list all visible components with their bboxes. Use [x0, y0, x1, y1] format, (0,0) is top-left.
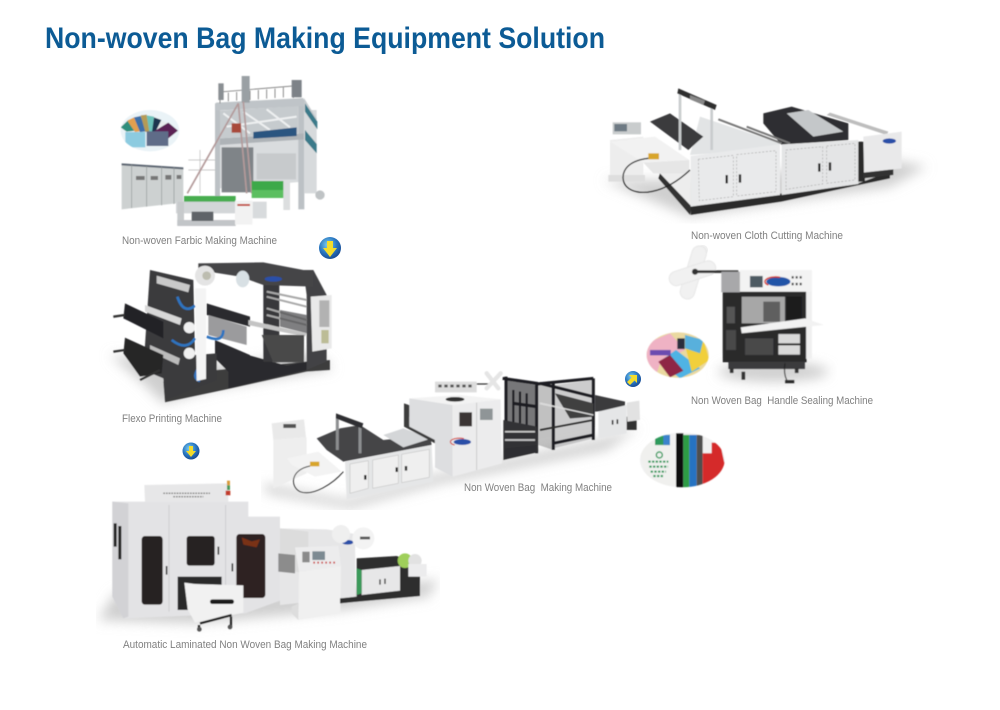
control panel — [311, 295, 332, 352]
drawer opening — [178, 577, 222, 610]
base — [163, 360, 330, 402]
underside — [658, 170, 691, 207]
control console — [610, 137, 643, 177]
feed table — [287, 452, 342, 477]
title: Non-woven Bag Making Equipment Solution — [45, 22, 605, 55]
top plate — [198, 262, 313, 287]
left printing frame — [143, 270, 217, 400]
caption: flexo machine: Flexo Printing Machine — [122, 413, 222, 425]
white sealing cabinet — [409, 395, 501, 405]
machine: non-woven fabric making — [117, 76, 325, 226]
base cabinet — [345, 445, 433, 499]
caption: laminated machine: Automatic Laminated Non Woven Bag Making Machine — [123, 639, 367, 651]
floor shadow — [98, 580, 438, 623]
winder base — [176, 202, 236, 213]
floor shadow — [718, 362, 828, 382]
paper rolls — [332, 525, 350, 543]
arrow icon: bag machine to handle sealing — [625, 371, 641, 387]
caption: handle sealing machine: Non Woven Bag Handle Sealing Machine — [691, 395, 873, 407]
main cabinet — [112, 502, 280, 618]
arrow icon: faint — [698, 245, 708, 255]
floor shadow — [603, 160, 927, 217]
machine: cloth cutting — [603, 88, 927, 217]
electrical cabinets — [122, 163, 183, 209]
arrow icon: fabric to printing — [319, 237, 341, 259]
machine: non-woven bag making line — [263, 373, 640, 508]
work table — [741, 318, 824, 333]
top hood — [144, 483, 228, 502]
cutting mechanism — [317, 425, 432, 462]
control console — [272, 419, 306, 440]
lower section — [778, 334, 800, 343]
blue hoses — [172, 297, 223, 381]
feet and pedal — [732, 368, 797, 380]
middle print units — [207, 303, 250, 327]
lifting arm — [680, 90, 712, 150]
right module — [340, 556, 420, 603]
logo — [265, 276, 282, 282]
infographic canvas — [46, 26, 924, 650]
white center column and rollers — [195, 288, 206, 381]
machine: flexo printing — [110, 262, 333, 403]
caption: fabric machine: Non-woven Farbic Making Machine — [122, 235, 277, 247]
top control panel — [740, 270, 812, 292]
steel frame — [188, 98, 317, 209]
window: left — [142, 536, 163, 605]
fabric swatches — [120, 110, 180, 152]
right frame — [263, 283, 279, 362]
logo — [454, 439, 471, 445]
machine: handle sealing — [638, 244, 828, 490]
sealing module — [404, 403, 435, 443]
top panel and paddles — [435, 382, 477, 392]
caption: cutting machine: Non-woven Cloth Cutting Machine — [691, 230, 843, 242]
pull-out cart — [184, 583, 243, 623]
middle machine — [280, 528, 356, 605]
window: center — [187, 536, 215, 566]
caption: bag making machine: Non Woven Bag Making Machine — [464, 482, 612, 494]
sealing head — [742, 297, 785, 323]
extrusion lines — [222, 147, 253, 192]
bag sample: stripes — [638, 432, 728, 490]
cabinets — [691, 144, 780, 207]
floor shadow — [110, 352, 333, 403]
green rollers — [252, 181, 284, 190]
output section — [595, 395, 625, 412]
window: right — [236, 534, 265, 598]
ink units — [123, 303, 163, 338]
control console — [295, 546, 341, 572]
machine: automatic laminated bag making — [98, 481, 438, 632]
arrow icon: printing to lamination — [182, 442, 200, 460]
frame infill — [505, 380, 537, 458]
mechanism — [690, 117, 780, 155]
feed table — [610, 137, 689, 163]
right end box — [858, 142, 865, 182]
black frame modules — [503, 377, 593, 453]
bag sample: handle bags — [646, 332, 710, 378]
machine body — [723, 292, 807, 362]
paddles — [667, 244, 718, 301]
floor shadow — [263, 427, 640, 508]
